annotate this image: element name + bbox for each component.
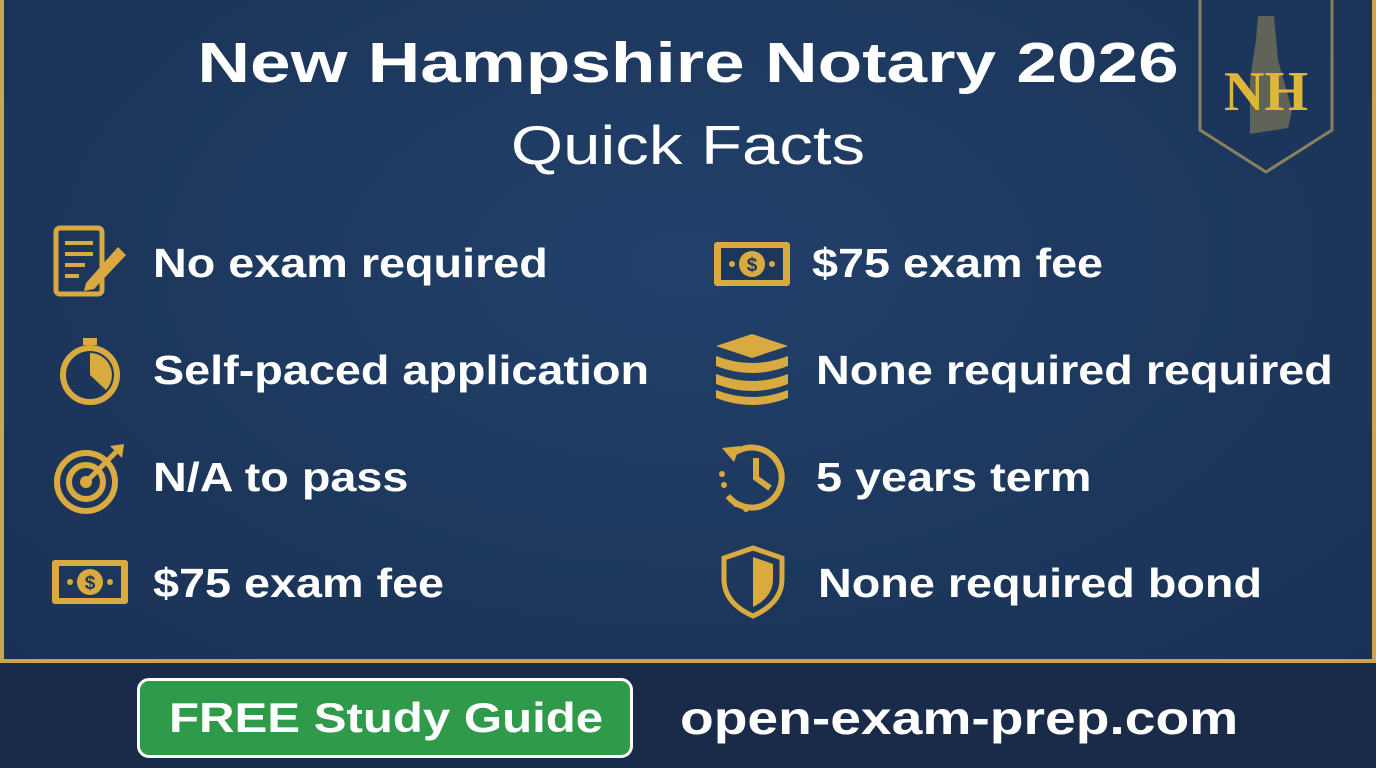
text: none required: None required required [816, 347, 1333, 393]
icon: books [716, 334, 788, 405]
icon: document pencil [54, 226, 126, 296]
icon: shield [722, 545, 784, 619]
text: self-paced: Self-paced application [153, 347, 649, 393]
icon: money [52, 560, 128, 604]
footer url: open-exam-prep.com [680, 692, 1238, 744]
icon: money: $ [85, 573, 96, 594]
text: N/A to pass: N/A to pass [153, 454, 408, 500]
text: exam fee right: $75 exam fee [812, 240, 1103, 286]
button: free study guide [137, 678, 633, 758]
text: exam fee left: $75 exam fee [153, 560, 444, 606]
badge: NH shield: NH [1224, 61, 1308, 123]
subtitle: Quick Facts [511, 114, 865, 176]
icon: clock history [719, 444, 785, 512]
icon: target [54, 444, 124, 514]
text: bond: None required bond [818, 560, 1262, 606]
button: free study guide: FREE Study Guide [169, 694, 603, 741]
icon: stopwatch [60, 338, 120, 405]
title: New Hampshire Notary 2026 [197, 31, 1179, 95]
text: term: 5 years term [816, 454, 1091, 500]
icon: money right [714, 242, 790, 286]
text: no exam: No exam required [153, 240, 548, 286]
badge: NH shield [1198, 0, 1334, 174]
icon: money right: $ [747, 255, 758, 276]
